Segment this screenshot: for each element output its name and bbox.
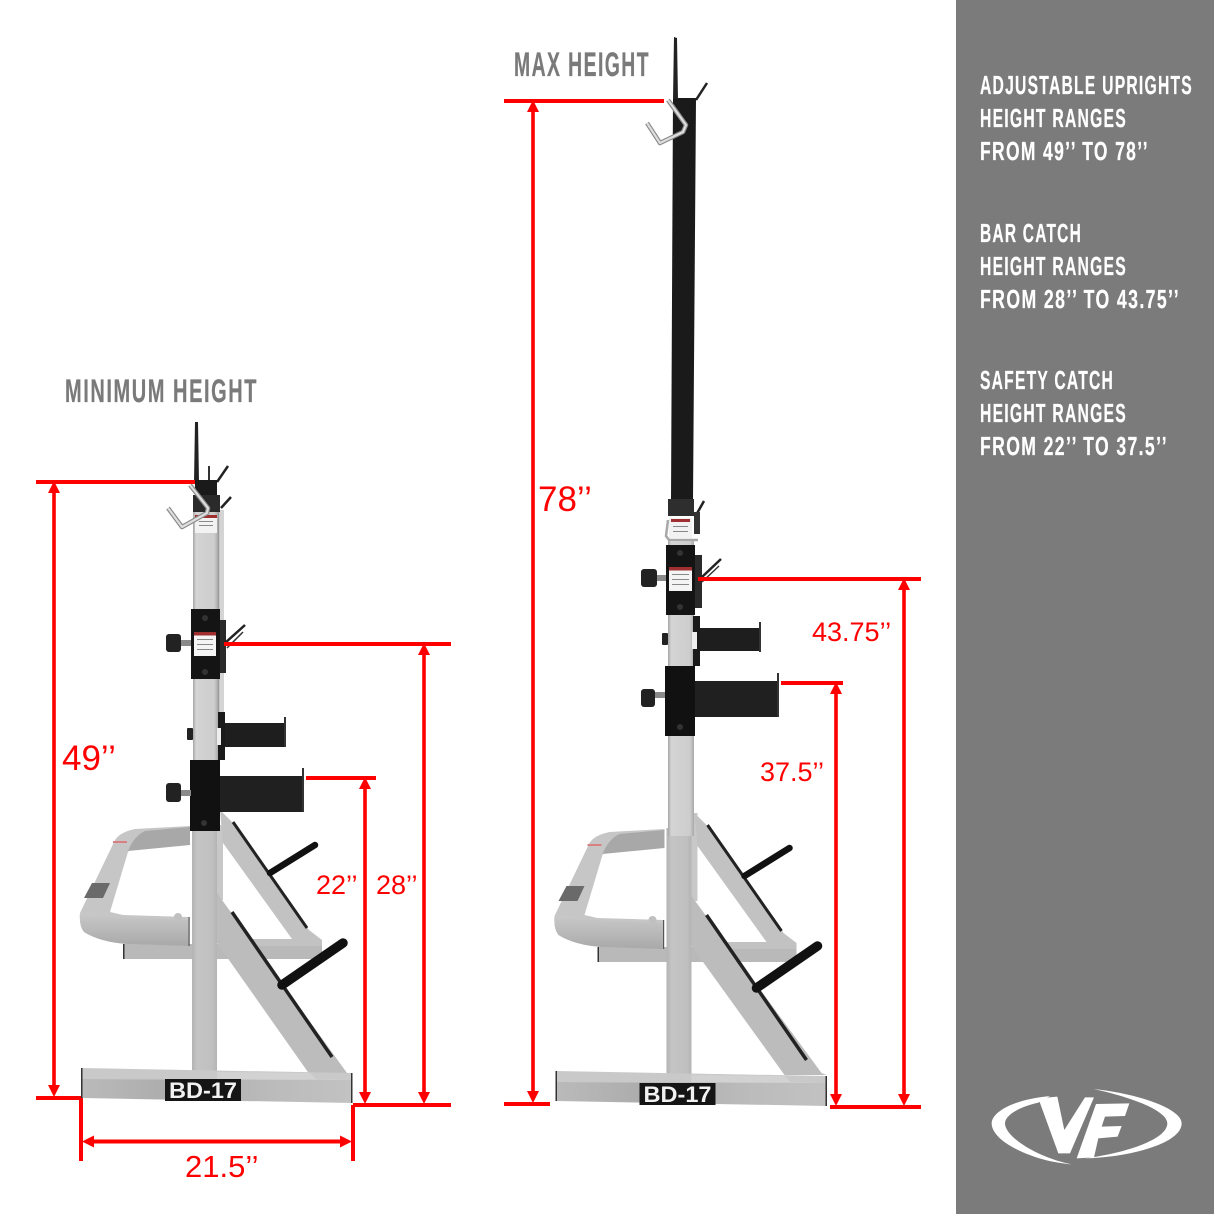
collar: safety catch bbox=[641, 666, 779, 736]
icon: VF logo bbox=[992, 1089, 1182, 1164]
dimension: 43.75 inch bar catch bbox=[698, 577, 921, 1109]
rack: minimum height bbox=[80, 422, 352, 1103]
collar: rear safety arm bbox=[187, 712, 286, 760]
dimension: 21.5 inch base width: 21.5’’ bbox=[185, 1149, 259, 1184]
text block: bar catch: BAR CATCH bbox=[980, 220, 1082, 248]
text block: safety catch: SAFETY CATCH bbox=[980, 367, 1114, 395]
rack: maximum height bbox=[554, 37, 827, 1107]
dimension: 78 inch maximum height: 78’’ bbox=[538, 480, 592, 519]
black upper post bbox=[647, 37, 707, 500]
heading: minimum height: MINIMUM HEIGHT bbox=[65, 373, 258, 409]
upper upright bbox=[168, 422, 231, 762]
text block: bar catch bbox=[980, 220, 1180, 314]
dimension: 21.5 inch base width bbox=[79, 1098, 355, 1184]
dimension: 37.5 inch safety catch: 37.5’’ bbox=[760, 757, 824, 787]
sleeve and warning plate bbox=[666, 499, 704, 540]
heading: max height: MAX HEIGHT bbox=[514, 46, 650, 84]
text block: safety catch bbox=[980, 367, 1168, 461]
lower frame bbox=[80, 810, 352, 1103]
dimension: 37.5 inch safety catch bbox=[760, 681, 843, 1106]
dimension: 28 inch bar catch bbox=[224, 642, 451, 1107]
dimension: 22 inch safety catch: 22’’ bbox=[316, 870, 358, 900]
dimension: 22 inch safety catch bbox=[306, 776, 376, 1104]
label: BD-17: BD-17 bbox=[644, 1082, 712, 1107]
text block: safety catch: HEIGHT RANGES bbox=[980, 400, 1127, 428]
label: BD-17: BD-17 bbox=[169, 1078, 237, 1103]
dimension: 78 inch maximum height bbox=[504, 99, 664, 1106]
text block: adjustable uprights: HEIGHT RANGES bbox=[980, 105, 1127, 133]
dimension: 28 inch bar catch: 28’’ bbox=[376, 870, 418, 900]
panel: height ranges bbox=[956, 0, 1214, 1214]
dimension: 49 inch minimum height: 49’’ bbox=[62, 739, 116, 778]
text block: adjustable uprights bbox=[980, 72, 1193, 166]
text block: bar catch: HEIGHT RANGES bbox=[980, 253, 1127, 281]
collar: rear safety arm bbox=[662, 616, 761, 666]
dimension: 43.75 inch bar catch: 43.75’’ bbox=[812, 617, 891, 647]
dimension: 49 inch minimum height bbox=[36, 480, 195, 1100]
silver upright bbox=[668, 541, 694, 836]
lower frame bbox=[554, 813, 827, 1107]
collar: bar catch bbox=[641, 545, 721, 615]
collar: safety catch bbox=[166, 760, 304, 831]
collar: bar catch bbox=[166, 609, 245, 679]
